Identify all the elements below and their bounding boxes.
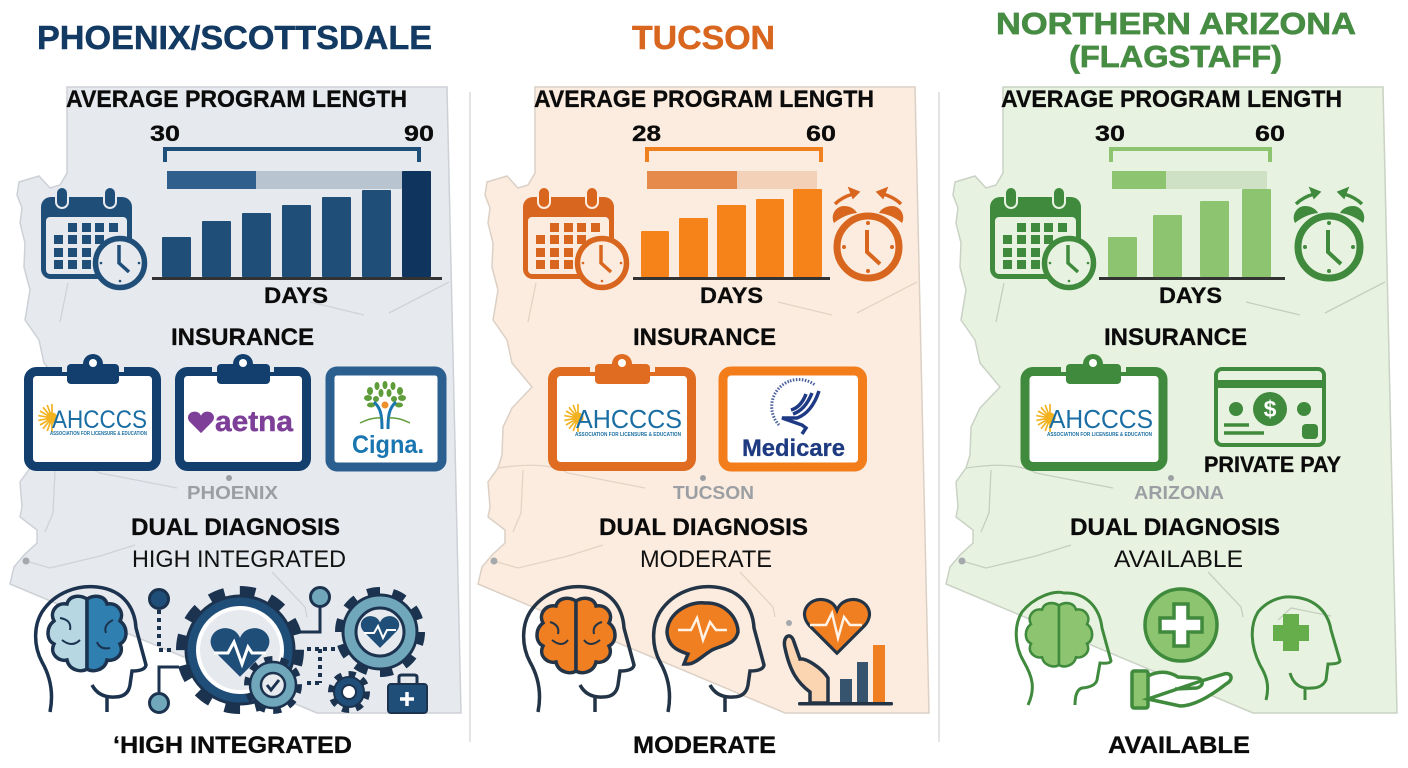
card: Aetna: [180, 354, 306, 466]
panel dividers: [470, 92, 939, 742]
subheading: dual diagnosis: DUAL DIAGNOSIS: [599, 514, 808, 541]
card: Aetna: aetna: [215, 406, 294, 438]
icon: private pay banknote: $: [1264, 396, 1277, 422]
footer label: moderate: MODERATE: [633, 732, 776, 759]
icon: head with brain: [524, 587, 634, 712]
icon: gear with heart (small): [340, 592, 420, 672]
card: AHCCCS: ASSOCIATION FOR LICENSURE & EDUCATION: [50, 431, 147, 437]
subheading: dual diagnosis: DUAL DIAGNOSIS: [131, 514, 340, 541]
heading: Phoenix/Scottsdale: PHOENIX/SCOTTSDALE: [37, 19, 432, 56]
subheading: insurance: INSURANCE: [171, 324, 314, 351]
card: AHCCCS: [552, 354, 692, 466]
range label: 28: 28: [632, 121, 661, 146]
map marker: [490, 558, 498, 564]
map label: Arizona: [1134, 475, 1224, 503]
map marker: [22, 558, 30, 564]
range label: 90: 90: [404, 121, 434, 146]
icon: head with medical cross: [1252, 597, 1340, 700]
heading: Northern Arizona (Flagstaff): NORTHERN ARIZONA: [996, 6, 1356, 41]
label: private pay: PRIVATE PAY: [1204, 452, 1341, 477]
range label: 60: 60: [1255, 121, 1285, 146]
icon: hand holding medical cross: [1132, 589, 1231, 708]
map background: Arizona: [10, 87, 461, 713]
map label: Phoenix: PHOENIX: [187, 483, 278, 503]
range bracket: [1111, 149, 1270, 162]
connectors and nodes: [150, 588, 342, 712]
icon: small gear: [331, 674, 367, 710]
subheading: average program length: AVERAGE PROGRAM LENGTH: [66, 86, 407, 113]
icon: calendar with clock: [41, 187, 144, 288]
axis label: days: DAYS: [1159, 283, 1222, 308]
footer label: high integrated: ‘HIGH INTEGRATED: [113, 732, 352, 759]
icon: head with brain: [36, 587, 146, 712]
value: available: AVAILABLE: [1114, 546, 1243, 573]
range label: 30: 30: [1095, 121, 1125, 146]
bar chart: days: [633, 171, 830, 280]
subheading: average program length: AVERAGE PROGRAM LENGTH: [534, 86, 874, 113]
subheading: insurance: INSURANCE: [1104, 324, 1247, 351]
map label: Phoenix: [187, 475, 278, 503]
icon: alarm clock: [833, 188, 903, 278]
icon: alarm clock: [1294, 188, 1364, 278]
icon: gear with heart: [182, 592, 298, 708]
card: Medicare: [723, 371, 862, 467]
card: Cigna: [330, 371, 442, 467]
card: Cigna: Cigna.: [352, 431, 424, 459]
heading: Northern Arizona (Flagstaff): (FLAGSTAFF): [1069, 39, 1282, 74]
range label: 30: 30: [150, 121, 180, 146]
value: high integrated: HIGH INTEGRATED: [132, 546, 346, 573]
map marker: [958, 558, 966, 564]
panel: Northern Arizona: [946, 6, 1397, 759]
card: AHCCCS: [1025, 354, 1163, 466]
map label: Tucson: [673, 475, 754, 503]
icon: hand, heart and bars: [784, 599, 893, 706]
icon: gear with check: [248, 660, 298, 710]
card: AHCCCS: AHCCCS: [576, 404, 682, 434]
subheading: insurance: INSURANCE: [633, 324, 776, 351]
icon: private pay banknote: [1216, 369, 1324, 445]
map label: Tucson: TUCSON: [673, 483, 754, 503]
map label: Arizona: ARIZONA: [1134, 483, 1224, 503]
card: AHCCCS: AHCCCS: [1049, 404, 1153, 434]
range label: 60: 60: [806, 121, 836, 146]
card: AHCCCS: ASSOCIATION FOR LICENSURE & EDUCATION: [1047, 432, 1152, 438]
icon: calendar with clock: [990, 187, 1094, 288]
bar chart: days: [152, 171, 442, 280]
bar chart: days: [1099, 171, 1285, 280]
card: AHCCCS: ASSOCIATION FOR LICENSURE & EDUCATION: [575, 432, 681, 438]
icon: medical kit: [388, 675, 427, 713]
card: Medicare: Medicare: [742, 435, 845, 462]
card: AHCCCS: [28, 354, 156, 466]
map background: Arizona: [946, 87, 1397, 713]
axis label: days: DAYS: [264, 283, 328, 308]
icon: head with brain and pulse: [654, 587, 764, 712]
range bracket: [165, 149, 419, 162]
map background: Arizona: [478, 87, 929, 713]
subheading: dual diagnosis: DUAL DIAGNOSIS: [1070, 514, 1280, 541]
subheading: average program length: AVERAGE PROGRAM LENGTH: [1001, 86, 1342, 113]
axis label: days: DAYS: [700, 283, 763, 308]
footer label: available: AVAILABLE: [1108, 732, 1250, 759]
heading: Northern Arizona (Flagstaff): [996, 6, 1356, 74]
panel: Phoenix/Scottsdale: [10, 19, 461, 759]
value: moderate: MODERATE: [640, 546, 772, 573]
range bracket: [647, 149, 821, 162]
icon: head with brain: [1016, 592, 1111, 705]
panel: Tucson: [478, 19, 929, 759]
heading: Tucson: TUCSON: [632, 19, 775, 56]
card: AHCCCS: AHCCCS: [52, 406, 147, 434]
icon: calendar with clock: [523, 187, 626, 288]
